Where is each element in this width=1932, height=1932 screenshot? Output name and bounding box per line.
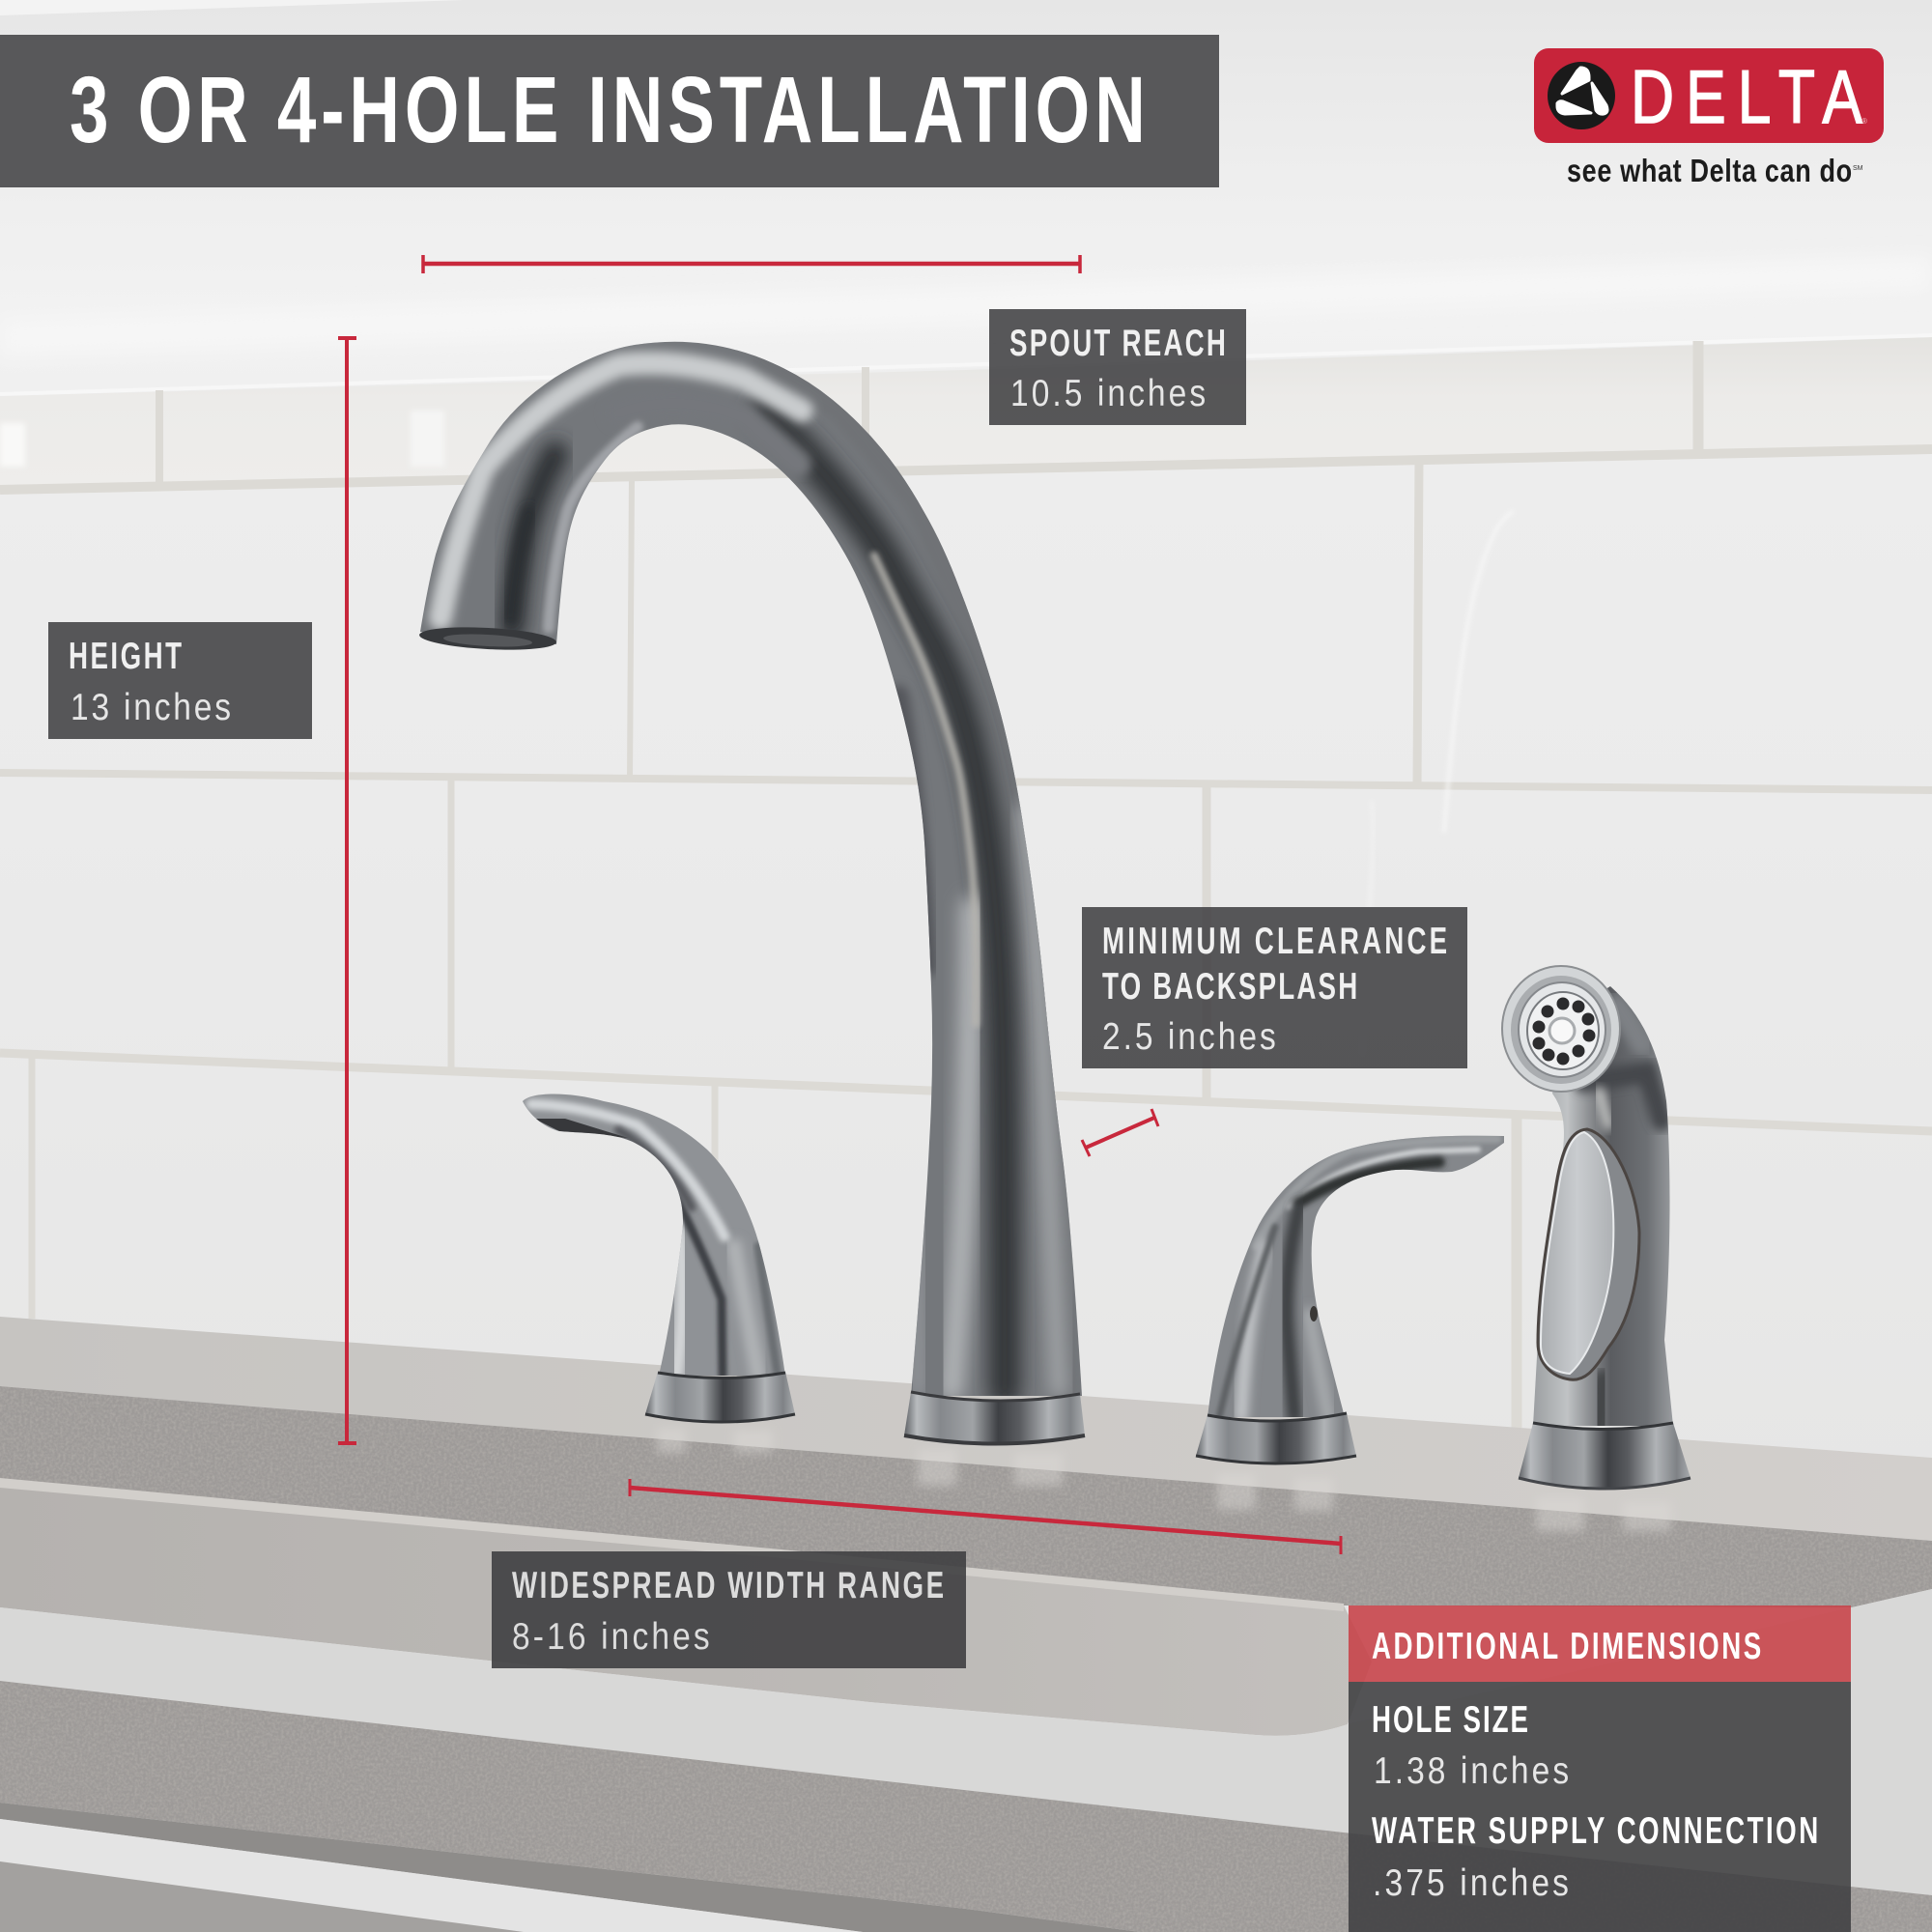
sprayer collar [1519, 1423, 1690, 1489]
value: 2.5 inches [1102, 1015, 1276, 1058]
logo emblem [1548, 62, 1615, 129]
tile highlights [0, 411, 1512, 1053]
faucet: side sprayer [1502, 966, 1690, 1489]
white strip [0, 1819, 863, 1932]
callout: widespread width range [492, 1551, 966, 1668]
hole size label: HOLE SIZE [1372, 1700, 1528, 1741]
label: HEIGHT [69, 637, 182, 677]
label: SPOUT REACH [1009, 324, 1226, 364]
registered mark: ® [1861, 117, 1867, 126]
callout: height [48, 622, 312, 739]
Delta logo [1534, 48, 1884, 189]
panel body [1349, 1682, 1851, 1932]
tile grout lines [0, 341, 1932, 1428]
callout: minimum clearance [1082, 907, 1467, 1068]
dimension line: widespread width [630, 1479, 1341, 1554]
label: MINIMUM CLEARANCE [1102, 922, 1447, 962]
top tile row [0, 337, 1932, 488]
faucet: right handle [1196, 1125, 1517, 1463]
water supply value: .375 inches [1373, 1861, 1569, 1904]
label: WIDESPREAD WIDTH RANGE [512, 1566, 944, 1606]
callout: spout reach [989, 309, 1246, 425]
sprayer head [1502, 966, 1620, 1092]
tagline: see what Delta can do [1567, 155, 1852, 189]
dimension line: spout reach [423, 255, 1080, 273]
dimension line: backsplash clearance [1082, 1109, 1158, 1156]
faucet: left handle [512, 1087, 802, 1422]
water supply label: WATER SUPPLY CONNECTION [1372, 1811, 1818, 1852]
value: 10.5 inches [1010, 372, 1206, 414]
dimension line: height [338, 338, 356, 1443]
faucet: main spout [406, 328, 1101, 1443]
panel header [1349, 1605, 1851, 1682]
sprayer trigger [1538, 1129, 1639, 1379]
main collar [904, 1392, 1085, 1443]
counter reflections [657, 1428, 1671, 1531]
value: 13 inches [71, 686, 231, 728]
right handle collar [1196, 1413, 1356, 1463]
upper cabinet [0, 0, 1932, 394]
left handle collar [645, 1372, 795, 1422]
title banner [0, 35, 1219, 187]
sink basin [0, 1480, 1372, 1736]
value: 8-16 inches [512, 1615, 710, 1658]
countertop front edge [0, 1386, 1932, 1607]
logo wordmark: DELTA [1631, 54, 1862, 139]
label line two: TO BACKSPLASH [1102, 967, 1357, 1008]
service mark: SM [1853, 165, 1863, 172]
lower stone band [0, 1681, 1932, 1932]
title text: 3 OR 4-HOLE INSTALLATION [70, 58, 1146, 162]
panel header: ADDITIONAL DIMENSIONS [1372, 1627, 1761, 1667]
hole size value: 1.38 inches [1374, 1749, 1569, 1792]
aerator [419, 624, 556, 653]
light lower counter [0, 1589, 1932, 1895]
countertop surface [0, 1317, 1932, 1541]
handle screw hole [1310, 1306, 1318, 1321]
panel: additional dimensions [1349, 1605, 1851, 1932]
